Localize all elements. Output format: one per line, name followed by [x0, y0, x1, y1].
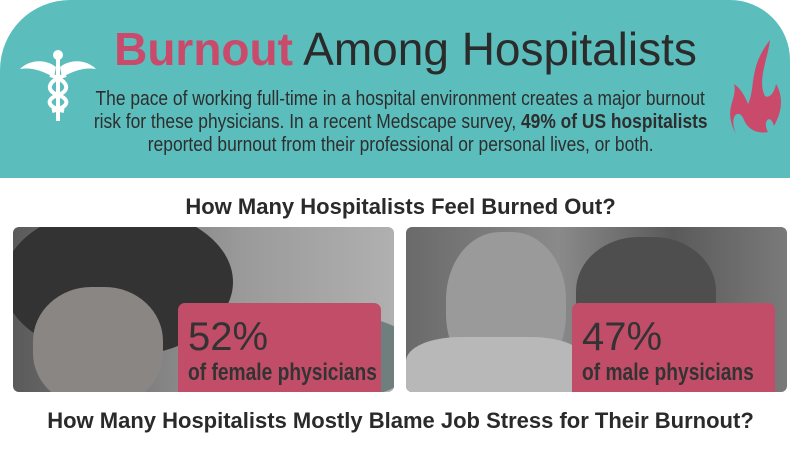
intro text: risk for these physicians. In a recent Medscape survey, 49% of US hospitalists	[94, 111, 707, 133]
icon: flame	[730, 40, 781, 134]
header panel	[0, 0, 790, 178]
heading: job stress: How Many Hospitalists Mostly Blame Job Stress for Their Burnout?	[47, 408, 754, 433]
photo panel: male	[406, 227, 787, 392]
title: Burnout Among Hospitalists	[114, 23, 697, 75]
photo panel: female	[13, 227, 394, 392]
intro text: The pace of working full-time in a hospital environment creates a major burnout	[96, 88, 705, 110]
stat: male: of male physicians	[582, 359, 754, 386]
icon: caduceus	[20, 50, 96, 121]
stat: female	[178, 303, 381, 392]
intro text	[94, 88, 707, 156]
stat: male: 47%	[582, 315, 662, 359]
heading: burned out: How Many Hospitalists Feel Burned Out?	[185, 194, 616, 219]
stat: female: 52%	[188, 315, 268, 359]
intro text: reported burnout from their professional or personal lives, or both.	[148, 134, 653, 156]
stat: female: of female physicians	[188, 359, 377, 386]
stat: male	[572, 303, 775, 392]
